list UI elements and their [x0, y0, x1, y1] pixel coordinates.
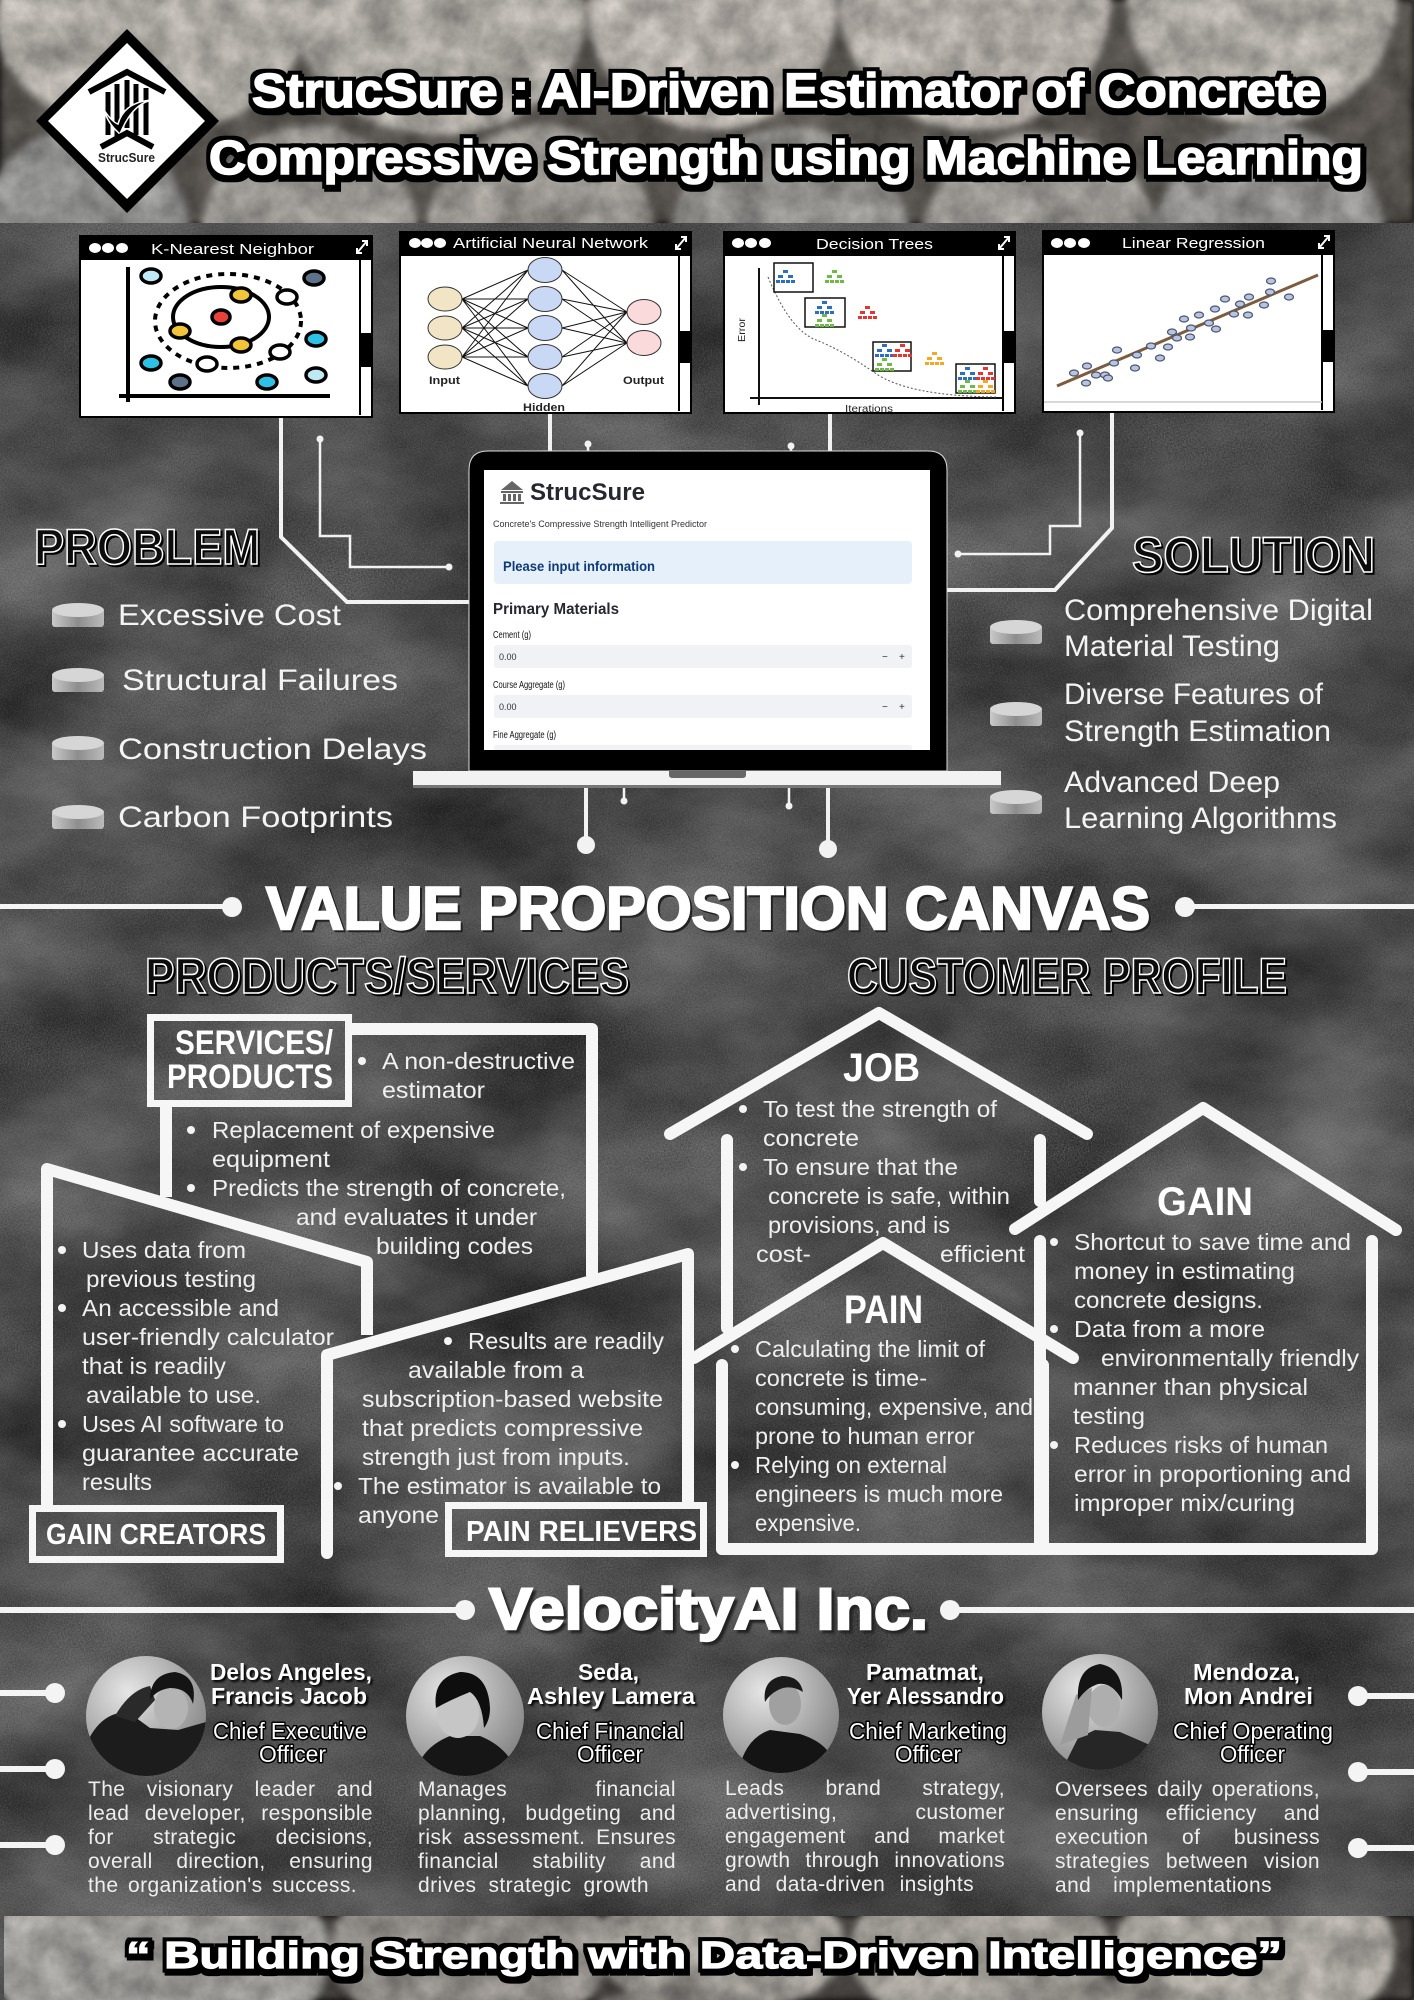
list: pain: consuming, expensive, and [755, 1394, 1033, 1420]
list: gain: testing [1073, 1403, 1145, 1429]
window: K-Nearest Neighbor [80, 236, 372, 417]
window: Decision Trees: Decision Trees [816, 236, 933, 253]
list: gain creators: previous testing [86, 1266, 256, 1292]
panel: job house: JOB [843, 1046, 920, 1090]
description: Mendoza: and implementations [1055, 1874, 1272, 1897]
description: Mendoza: execution of business [1055, 1826, 1320, 1849]
list: job: cost- [756, 1241, 811, 1267]
list: gain: manner than physical [1073, 1374, 1308, 1400]
heading: value proposition canvas: VALUE PROPOSITION CANVAS [266, 875, 1150, 942]
problem list [52, 599, 427, 834]
name and role: Mendoza: Mendoza, [1193, 1659, 1300, 1685]
list: gain: error in proportioning and [1074, 1461, 1351, 1487]
description: Pamatmat: Leads brand strategy, [725, 1777, 1005, 1800]
problem list: Carbon Footprints [118, 801, 393, 834]
list: pain relievers: Results are readily [468, 1328, 665, 1354]
heading: VelocityAI Inc.: VelocityAI Inc. [489, 1577, 928, 1642]
window: Artificial Neural Network: Output [623, 375, 664, 387]
list: job: concrete is safe, within [768, 1183, 1010, 1209]
list: gain: Data from a more [1074, 1316, 1265, 1342]
description: Seda: planning, budgeting and [418, 1802, 676, 1825]
title [209, 65, 1363, 185]
solution list: Advanced Deep [1064, 766, 1280, 799]
name and role: Delos Angeles [210, 1659, 372, 1767]
laptop with StrucSure app screen: Concrete's Compressive Strength Intelligent Predictor [493, 519, 707, 530]
list: services/products: Predicts the strength of concrete, [212, 1175, 566, 1201]
list: pain: Relying on external [755, 1452, 947, 1478]
window: Artificial Neural Network: Artificial Neural Network [453, 235, 649, 252]
list: pain relievers: The estimator is available to [358, 1473, 661, 1499]
list: pain: prone to human error [755, 1423, 975, 1449]
description: Delos Angeles: for strategic decisions, [88, 1826, 373, 1849]
list: services/products: equipment [212, 1146, 331, 1172]
list: pain: Calculating the limit of [755, 1336, 986, 1362]
window: Decision Trees: Iterations [845, 404, 893, 415]
portrait: Delos Angeles [86, 1656, 206, 1776]
name and role: Seda [527, 1659, 695, 1767]
name and role: Mendoza: Officer [1220, 1741, 1285, 1767]
list: pain relievers: strength just from inputs. [362, 1444, 630, 1470]
description: Mendoza: Oversees daily operations, [1055, 1778, 1320, 1801]
description: Pamatmat: growth through innovations [725, 1849, 1005, 1872]
panel: pain house: PAIN [844, 1288, 923, 1332]
description: Delos Angeles [88, 1778, 373, 1897]
list: pain relievers: anyone [358, 1502, 439, 1528]
description: Delos Angeles: the organization's success. [88, 1874, 357, 1897]
name and role: Pamatmat: Yer Alessandro [847, 1683, 1004, 1709]
solution list: Comprehensive Digital [1064, 594, 1373, 627]
laptop with StrucSure app screen: Fine Aggregate (g) [493, 730, 556, 741]
list: gain: concrete designs. [1074, 1287, 1263, 1313]
list: gain creators: Uses AI software to [82, 1411, 284, 1437]
list: gain creators: Uses data from [82, 1237, 246, 1263]
laptop with StrucSure app screen: Course Aggregate (g) [493, 680, 565, 691]
panel: gain house [722, 1108, 1396, 1549]
laptop with StrucSure app screen: 0.00 [499, 702, 517, 712]
logo: StrucSure diamond: StrucSure [98, 150, 155, 165]
list: services/products: Replacement of expensive [212, 1117, 495, 1143]
list: job: provisions, and is [768, 1212, 950, 1238]
laptop with StrucSure app screen: − [882, 652, 888, 663]
label box: pain relievers: PAIN RELIEVERS [466, 1516, 697, 1548]
description: Delos Angeles: lead developer, responsible [88, 1802, 373, 1825]
window: Artificial Neural Network: Hidden [523, 402, 565, 414]
name and role: Mendoza [1173, 1659, 1333, 1767]
portrait: Seda [405, 1656, 525, 1776]
list: gain creators: guarantee accurate [82, 1440, 299, 1466]
tagline: “ Building Strength with Data-Driven Intelligence” [126, 1935, 1282, 1977]
list: services/products: building codes [376, 1233, 533, 1259]
description: Seda: financial stability and [418, 1850, 676, 1873]
name and role: Seda: Ashley Lamera [527, 1683, 695, 1709]
team side connector dots [0, 1683, 1414, 1858]
name and role: Pamatmat: Officer [895, 1741, 961, 1767]
heading: products/services: PRODUCTS/SERVICES [145, 948, 629, 1004]
description: Seda: risk assessment. Ensures [418, 1826, 676, 1849]
description: Pamatmat: and data-driven insights [725, 1873, 974, 1896]
label box: gain creators: GAIN CREATORS [46, 1519, 266, 1551]
list: gain creators: user-friendly calculator [82, 1324, 334, 1350]
window: Decision Trees [724, 232, 1015, 415]
name and role: Mendoza: Chief Operating [1173, 1718, 1333, 1744]
problem list: Excessive Cost [118, 599, 342, 632]
list: services/products: A non-destructive [382, 1048, 575, 1074]
panel: gain house: GAIN [1157, 1180, 1253, 1224]
list: pain: expensive. [755, 1510, 861, 1536]
connector lines between models and laptop [281, 412, 1112, 858]
list: pain relievers: subscription-based website [362, 1386, 663, 1412]
list: pain relievers: available from a [408, 1357, 584, 1383]
solution list: Learning Algorithms [1064, 802, 1337, 835]
solution list: Diverse Features of [1064, 678, 1324, 711]
name and role: Pamatmat: Chief Marketing [849, 1718, 1007, 1744]
laptop with StrucSure app screen: 0.00 [499, 652, 517, 662]
list: pain: concrete is time- [755, 1365, 927, 1391]
list: pain [731, 1336, 1033, 1536]
laptop with StrucSure app screen: + [899, 702, 905, 713]
list: gain: Shortcut to save time and [1074, 1229, 1351, 1255]
window: Artificial Neural Network [400, 232, 691, 414]
description: Mendoza [1055, 1778, 1320, 1897]
problem list: Structural Failures [122, 664, 398, 697]
laptop with StrucSure app screen: + [899, 652, 905, 663]
description: Seda: drives strategic growth [418, 1874, 649, 1897]
section rule: value proposition [0, 897, 1414, 917]
list: job: To test the strength of [763, 1096, 998, 1122]
name and role: Mendoza: Mon Andrei [1184, 1683, 1313, 1709]
description: Pamatmat: advertising, customer [725, 1801, 1005, 1824]
list: services/products: and evaluates it under [296, 1204, 537, 1230]
laptop with StrucSure app screen: StrucSure [530, 479, 645, 506]
label box: pain relievers [448, 1506, 704, 1554]
list: gain [1050, 1229, 1360, 1516]
solution list: Strength Estimation [1064, 715, 1331, 748]
description: Mendoza: ensuring efficiency and [1055, 1802, 1320, 1825]
heading: PROBLEM: PROBLEM [34, 519, 260, 575]
list: gain creators: available to use. [86, 1382, 261, 1408]
portrait: Pamatmat [722, 1656, 840, 1774]
panel: gain creators [32, 1169, 367, 1560]
section rule: team [0, 1600, 1414, 1620]
label box: services/products: SERVICES/ [175, 1024, 333, 1062]
list: job: To ensure that the [763, 1154, 958, 1180]
name and role: Seda: Chief Financial [536, 1718, 684, 1744]
window: Linear Regression [1043, 231, 1334, 412]
description: Pamatmat [725, 1777, 1005, 1896]
name and role: Pamatmat: Pamatmat, [866, 1659, 984, 1685]
name and role: Delos Angeles: Delos Angeles, [210, 1659, 372, 1685]
laptop with StrucSure app screen: Primary Materials [493, 601, 619, 618]
header band: concrete cylinders photo [0, 0, 1414, 223]
heading: SOLUTION: SOLUTION [1132, 527, 1375, 583]
list: gain: improper mix/curing [1074, 1490, 1295, 1516]
list: gain: money in estimating [1074, 1258, 1295, 1284]
description: Seda: Manages financial [418, 1778, 676, 1801]
name and role: Seda: Seda, [578, 1659, 639, 1685]
laptop with StrucSure app screen [413, 451, 1001, 788]
list: pain: engineers is much more [755, 1481, 1003, 1507]
window: Linear Regression: Linear Regression [1122, 235, 1265, 252]
list: gain creators: An accessible and [82, 1295, 279, 1321]
name and role: Seda: Officer [577, 1741, 643, 1767]
footer band: concrete cylinders photo [4, 1916, 1414, 2000]
list: gain creators: results [82, 1469, 152, 1495]
list: gain: environmentally friendly [1101, 1345, 1360, 1371]
name and role: Delos Angeles: Francis Jacob [211, 1683, 367, 1709]
name and role: Delos Angeles: Officer [259, 1741, 326, 1767]
solution list [990, 594, 1373, 835]
list: pain relievers: that predicts compressive [362, 1415, 643, 1441]
label box: services/products [150, 1018, 348, 1104]
laptop with StrucSure app screen: − [882, 702, 888, 713]
description: Delos Angeles: The visionary leader and [88, 1778, 373, 1801]
list: pain relievers [334, 1328, 665, 1528]
portrait: Mendoza [1041, 1653, 1159, 1771]
list: gain: Reduces risks of human [1074, 1432, 1328, 1458]
logo: StrucSure diamond [36, 29, 219, 213]
list: job: concrete [763, 1125, 859, 1151]
problem list: Construction Delays [118, 733, 427, 766]
description: Seda [418, 1778, 676, 1897]
list: job: efficient [940, 1241, 1026, 1267]
title: Compressive Strength using Machine Learning [209, 132, 1363, 185]
list: gain creators: that is readily [82, 1353, 227, 1379]
laptop with StrucSure app screen: Please input information [503, 558, 655, 574]
window: Artificial Neural Network: Input [429, 375, 460, 387]
panel: pain relievers [327, 1254, 704, 1554]
list: job [739, 1096, 1026, 1267]
window: Decision Trees: Error [737, 317, 748, 342]
panel: services/products [150, 1018, 592, 1276]
list: services/products: estimator [382, 1077, 485, 1103]
name and role: Delos Angeles: Chief Executive [213, 1718, 367, 1744]
label box: gain creators [32, 1508, 280, 1560]
label box: services/products: PRODUCTS [167, 1058, 333, 1096]
title: StrucSure : AI-Driven Estimator of Concrete [252, 65, 1321, 118]
description: Delos Angeles: overall direction, ensuring [88, 1850, 373, 1873]
list: services/products [187, 1048, 575, 1259]
window: K-Nearest Neighbor: K-Nearest Neighbor [151, 241, 314, 258]
solution list: Material Testing [1064, 630, 1280, 663]
list: gain creators [58, 1237, 334, 1495]
heading: customer profile: CUSTOMER PROFILE [847, 948, 1287, 1004]
description: Mendoza: strategies between vision [1055, 1850, 1320, 1873]
laptop with StrucSure app screen: Cement (g) [493, 630, 531, 641]
panel: job house [670, 1013, 1087, 1328]
panel: pain house [694, 1243, 1073, 1549]
description: Pamatmat: engagement and market [725, 1825, 1005, 1848]
name and role: Pamatmat [847, 1659, 1007, 1767]
